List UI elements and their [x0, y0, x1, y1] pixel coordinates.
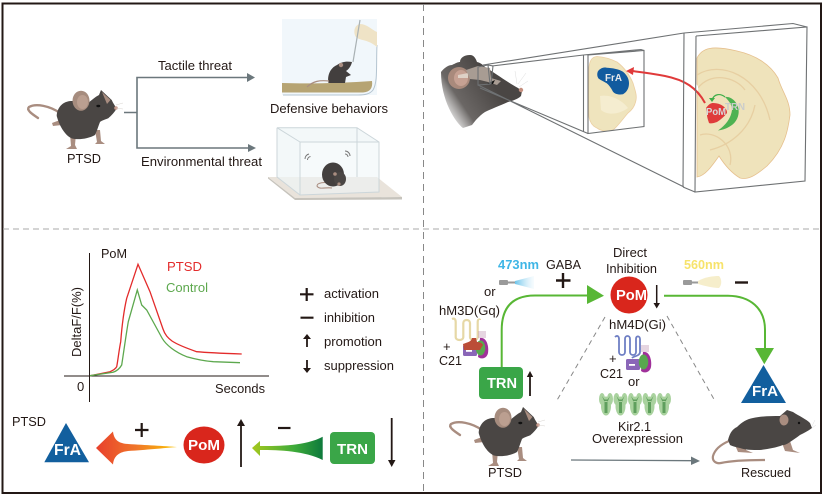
label: PTSD: PTSD [67, 151, 101, 166]
line chart: PoM DeltaF/F: PoM [101, 246, 127, 261]
label: plus C21 [600, 351, 623, 381]
illustration: mouse head with implant [441, 55, 528, 128]
icon: hM3D receptor [452, 319, 488, 358]
label: plus C21: + [609, 351, 617, 366]
icon: rescued mouse [713, 410, 816, 463]
illustration: PoM and TRN brain section: TRN [725, 102, 745, 113]
label: GABA: GABA [546, 257, 581, 272]
label: Direct Inhibition [606, 245, 657, 276]
illustration: PoM and TRN brain section [626, 24, 807, 192]
label: hM3D(Gq): hM3D(Gq) [439, 303, 500, 318]
label: 473nm: 473nm [498, 257, 539, 272]
line chart: PoM DeltaF/F [64, 246, 269, 402]
label: or: or [628, 374, 640, 389]
node: PoM [610, 276, 648, 314]
symbol: minus [735, 281, 748, 284]
arrow: PoM to FrA activation [96, 432, 177, 464]
illustration: PoM and TRN brain section: PoM [706, 107, 726, 118]
arrow: PoM suppressed [654, 285, 660, 308]
node: TRN [479, 367, 523, 399]
line chart: PoM DeltaF/F: DeltaF/F(%) [69, 287, 84, 357]
node: FrA [44, 423, 89, 462]
symbol: plus [556, 273, 570, 288]
icon: PTSD mouse [450, 407, 545, 466]
arrow: TRN promoted [527, 371, 533, 396]
line chart: PoM DeltaF/F: 0 [77, 379, 84, 394]
label: Direct Inhibition: Direct [613, 245, 647, 260]
line chart: PoM DeltaF/F: Control [166, 280, 208, 295]
line chart: PoM DeltaF/F: PTSD [167, 259, 202, 274]
icon: Kir2.1 channels [599, 393, 671, 416]
arrow: TRN suppressed [388, 418, 396, 467]
node: TRN: TRN [487, 375, 517, 392]
label: Environmental threat: Environmental threat [141, 154, 262, 169]
arrow: TRN to PoM inhibition [252, 437, 323, 460]
label: PTSD: PTSD [12, 414, 46, 429]
label: or: or [484, 284, 496, 299]
node: FrA: FrA [54, 442, 81, 459]
node: FrA [741, 365, 786, 403]
illustration: environmental threat box [268, 128, 402, 200]
label: hM4D(Gi): hM4D(Gi) [609, 317, 666, 332]
node: TRN: TRN [337, 441, 368, 458]
icon: blue light fiber [499, 276, 534, 289]
label: Tactile threat: Tactile threat [158, 58, 232, 73]
label: Kir2.1 Overexpression: Kir2.1 [618, 419, 651, 434]
arrow: PoM promoted [237, 419, 245, 467]
label: PTSD: PTSD [488, 465, 522, 480]
label: plus C21: + [443, 339, 451, 354]
label: Kir2.1 Overexpression: Overexpression [592, 431, 683, 446]
icon: yellow light fiber [683, 276, 721, 288]
label: 560nm: 560nm [684, 257, 724, 272]
symbol: plus [135, 423, 148, 437]
illustration: FrA brain section: FrA [605, 73, 622, 84]
legend: symbols: suppression [324, 358, 394, 373]
arrow: PoM to FrA [664, 296, 774, 364]
label: plus C21: C21 [439, 353, 462, 368]
label: plus C21: C21 [600, 366, 623, 381]
label: Kir2.1 Overexpression [592, 419, 683, 446]
legend: symbols: activation [324, 286, 379, 301]
node: PoM: PoM [616, 287, 647, 304]
illustration: tactile test with filament [282, 19, 377, 95]
arrow: branching threat paths [124, 73, 256, 152]
node: PoM: PoM [188, 437, 220, 454]
arrow: TRN to PoM [502, 285, 604, 368]
node: PoM [184, 426, 224, 464]
legend: symbols [300, 286, 394, 373]
label: Defensive behaviors: Defensive behaviors [270, 101, 388, 116]
legend: symbols: inhibition [324, 310, 375, 325]
panel: PoM activity and circuit [12, 246, 396, 467]
line chart: PoM DeltaF/F: Seconds [215, 381, 265, 396]
label: Direct Inhibition: Inhibition [606, 261, 657, 276]
node: TRN [330, 432, 375, 464]
icon: hM4D receptor [615, 336, 651, 372]
symbol: minus [278, 427, 290, 429]
panel: brain recording schematic [441, 24, 807, 192]
illustration: perspective slice frames [478, 33, 684, 187]
label: Rescued: Rescued [741, 465, 791, 480]
panel: rescue interventions [439, 245, 816, 480]
illustration: FrA brain section [584, 50, 644, 134]
icon: PTSD mouse [28, 90, 123, 149]
arrow: PTSD to rescued [571, 456, 700, 465]
legend: symbols: promotion [324, 334, 382, 349]
label: plus C21 [439, 339, 462, 368]
panel: threat behaviours [28, 19, 402, 200]
node: FrA: FrA [752, 383, 778, 400]
